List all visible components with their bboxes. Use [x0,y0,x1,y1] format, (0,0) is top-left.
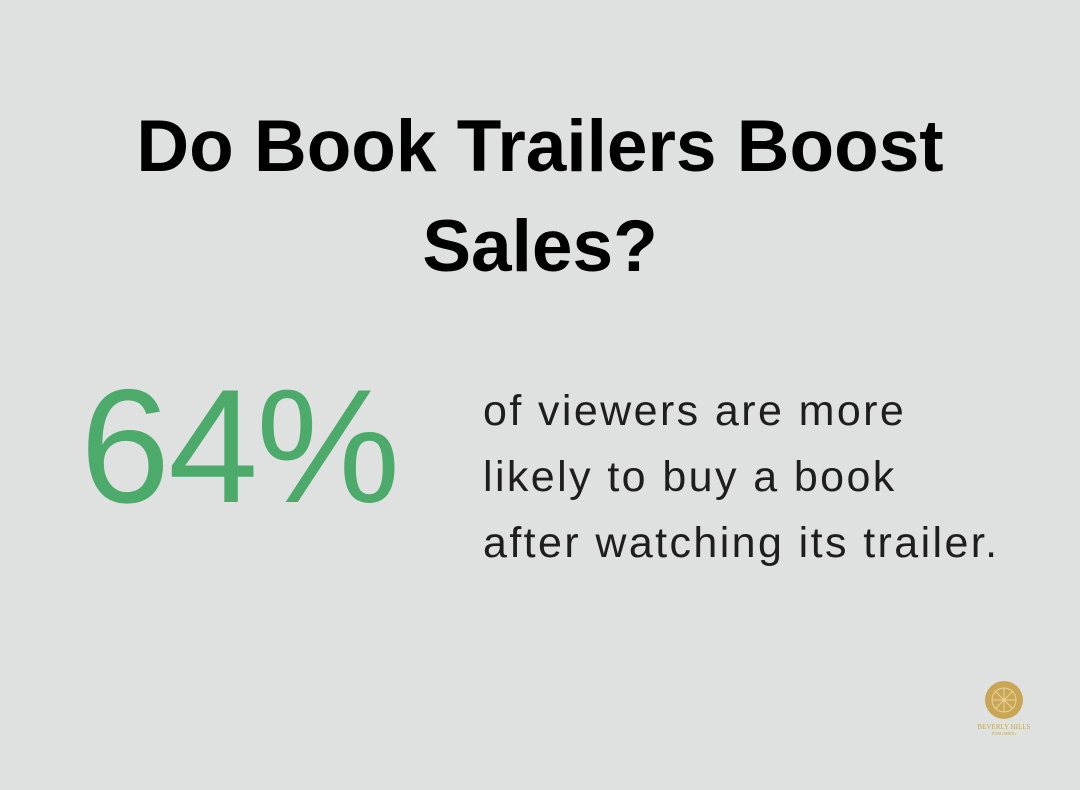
description text: likely to buy a book [483,453,897,501]
statistic: 64%: 64% [80,356,398,537]
title [136,106,944,287]
logo: BEVERLY HILLS [978,723,1030,731]
description text: after watching its trailer. [483,519,1000,567]
logo: PUBLISHING [992,731,1016,736]
title: Do Book Trailers Boost [136,106,944,187]
description text [483,387,1000,567]
title: Sales? [422,206,658,287]
logo [978,681,1030,736]
description text: of viewers are more [483,387,906,435]
